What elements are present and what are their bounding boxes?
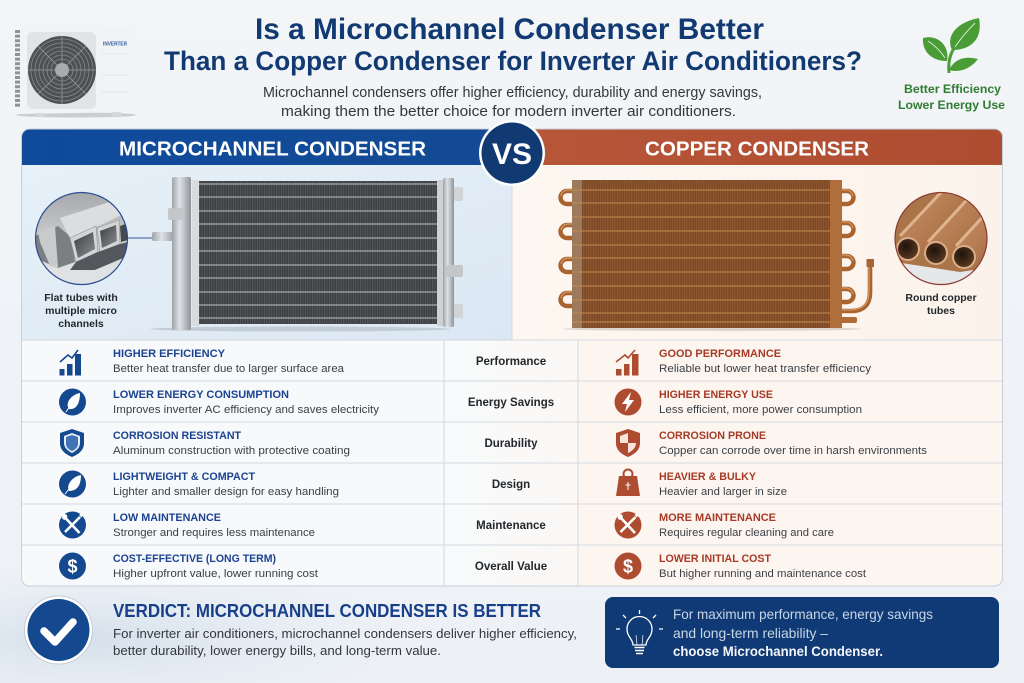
row: corrosion resistant: Aluminum construction with protective coating [113,445,350,457]
row: lightweight and compact [59,470,339,498]
row: heavier and bulky: HEAVIER & BULKY [659,471,757,483]
badge: better efficiency: Lower Energy Use [898,98,1005,112]
subtitle [263,85,762,120]
row: more maintenance: Requires regular cleaning and care [659,527,834,539]
callout: recommendation: For maximum performance, energy savings [673,606,933,622]
row: cost-effective: Higher upfront value, lower running cost [113,568,319,580]
row: low maintenance [59,512,315,539]
row: lower energy consumption: LOWER ENERGY CONSUMPTION [113,389,289,401]
row: higher efficiency: HIGHER EFFICIENCY [113,348,226,360]
icon: outdoor inverter AC unit [16,23,136,118]
icon: leaf [59,388,86,416]
row: lightweight and compact: Lighter and smaller design for easy handling [113,486,339,498]
icon: dollar: $ [67,556,78,576]
callout: flat tubes [35,192,128,286]
callout: recommendation: choose Microchannel Condenser. [673,643,883,659]
caption: round copper tubes: tubes [927,305,955,317]
icon: lightning bolt [614,388,642,416]
heading: copper: COPPER CONDENSER [645,138,870,160]
caption: round copper tubes: Round copper [905,292,977,304]
panel divider and table grid [21,165,1003,586]
icon: outdoor inverter AC unit: INVERTER [103,42,127,48]
callout: round copper tubes [894,192,988,286]
row: corrosion resistant [60,429,350,457]
panel: comparison card background [21,165,1003,586]
table: category column: Maintenance [476,520,546,532]
caption: flat tubes [44,292,118,330]
caption: flat tubes: channels [58,318,104,330]
heading: microchannel: MICROCHANNEL CONDENSER [119,138,427,160]
row: lower energy consumption [59,388,379,416]
badge: VS: VS [492,138,532,171]
row: corrosion prone: Copper can corrode over time in harsh environments [659,445,927,457]
caption: flat tubes: Flat tubes with [44,292,118,304]
icon: weight [616,470,640,496]
row: heavier and bulky [616,470,787,498]
connector line [127,237,152,239]
title: Is a Microchannel Condenser Better [255,13,764,46]
icon: bar chart [60,350,81,376]
panel: microchannel condenser [22,129,512,332]
row: low maintenance: LOW MAINTENANCE [113,512,221,524]
image: copper condenser [560,180,874,331]
icon: cracked shield [616,429,640,457]
table: category column: Overall Value [475,561,547,573]
caption: flat tubes: multiple micro [45,305,117,317]
row: lightweight and compact: LIGHTWEIGHT & COMPACT [113,471,255,483]
row: higher energy use: HIGHER ENERGY USE [659,389,773,401]
row: good performance: Reliable but lower heat transfer efficiency [659,363,871,375]
heading: microchannel [22,129,512,165]
image: aluminium microchannel condenser [150,177,463,332]
row: lower initial cost: But higher running and maintenance cost [659,568,867,580]
card outline [22,129,1002,586]
badge: VS [479,120,545,186]
badge: better efficiency: Better Efficiency [904,82,1001,96]
icon: shield [60,429,84,457]
table: category column [468,356,554,573]
row: higher energy use [614,388,862,416]
icon: dollar: $ [623,556,633,576]
callout: recommendation: and long-term reliability – [673,625,828,641]
heading: copper [512,129,1003,165]
row: low maintenance: Stronger and requires less maintenance [113,527,315,539]
row: cost-effective: COST-EFFECTIVE (LONG TERM) [113,553,276,565]
verdict text [113,601,577,658]
row: corrosion prone: CORROSION PRONE [659,430,766,442]
row: good performance [616,348,871,376]
row: more maintenance [614,512,834,539]
icon: feather [59,470,86,498]
row: higher efficiency [60,348,345,376]
row: corrosion resistant: CORROSION RESISTANT [113,430,241,442]
row: lower initial cost: LOWER INITIAL COST [659,553,771,565]
icon: green plant [923,18,980,73]
icon: bar chart [616,350,638,376]
icon: dollar [614,552,642,580]
panel: copper condenser [512,129,1010,331]
verdict text: better durability, lower energy bills, and long-term value. [113,643,441,658]
caption: round copper tubes [905,292,977,317]
row: heavier and bulky: Heavier and larger in size [659,486,787,498]
icon: tools [59,512,86,538]
table: category column: Design [492,479,530,491]
row: higher energy use: Less efficient, more power consumption [659,404,862,416]
row: higher efficiency: Better heat transfer due to larger surface area [113,363,345,375]
row: lower initial cost [614,552,867,580]
table: copper column [614,348,927,580]
icon: light bulb [616,610,663,654]
row: cost-effective [59,552,319,580]
row: lower energy consumption: Improves inverter AC efficiency and saves electricity [113,404,379,416]
table: category column: Energy Savings [468,397,554,409]
callout: recommendation [605,597,999,668]
row: good performance: GOOD PERFORMANCE [659,348,781,360]
row: more maintenance: MORE MAINTENANCE [659,512,776,524]
verdict text: For inverter air conditioners, microchannel condensers deliver higher efficiency, [113,626,577,641]
table: category column: Performance [476,356,546,368]
icon: tools [614,512,642,538]
title: Than a Copper Condenser for Inverter Air Conditioners? [164,46,862,76]
subtitle: Microchannel condensers offer higher efficiency, durability and energy savings, [263,85,762,101]
verdict text: VERDICT: MICROCHANNEL CONDENSER IS BETTER [113,601,541,621]
badge: better efficiency [898,18,1005,112]
subtitle: making them the better choice for modern inverter air conditioners. [281,104,736,120]
table: microchannel column [59,348,379,580]
row: corrosion prone [616,429,927,457]
icon: verdict check mark [24,596,92,664]
title [164,13,862,76]
icon: dollar [59,552,86,580]
table: category column: Durability [484,438,538,450]
